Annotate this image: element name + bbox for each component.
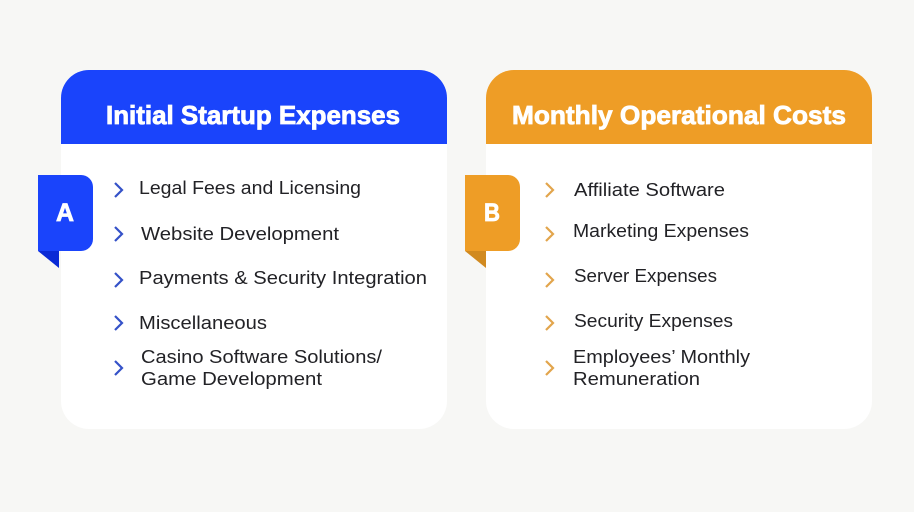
badge B xyxy=(465,175,520,268)
list: monthly items: Marketing Expenses xyxy=(573,220,749,241)
heading: initial startup expenses: Initial Startup Expenses xyxy=(106,100,400,130)
badge A: A xyxy=(56,199,74,227)
panel: initial startup expenses xyxy=(38,70,447,429)
list: monthly items: Server Expenses xyxy=(574,265,717,286)
list: startup items xyxy=(115,177,427,389)
list: startup items: Payments & Security Integration xyxy=(139,267,427,288)
list: startup items: Website Development xyxy=(141,223,339,244)
heading: monthly operational costs: Monthly Operational Costs xyxy=(512,100,846,130)
list: startup items: Legal Fees and Licensing xyxy=(139,177,361,198)
panel header: orange xyxy=(486,70,872,144)
list: startup items: Miscellaneous xyxy=(139,312,267,333)
list: monthly items: Employees’ Monthly xyxy=(573,346,751,367)
list: monthly items xyxy=(546,179,751,389)
panel: monthly operational costs xyxy=(465,70,872,429)
list: startup items: Casino Software Solutions/ xyxy=(141,346,383,367)
badge A xyxy=(38,175,93,268)
list: monthly items: Affiliate Software xyxy=(574,179,725,200)
panel header: blue xyxy=(61,70,447,144)
list: monthly items: Remuneration xyxy=(573,368,700,389)
list: startup items: Game Development xyxy=(141,368,322,389)
badge B: B xyxy=(484,199,500,227)
list: monthly items: Security Expenses xyxy=(574,310,733,331)
